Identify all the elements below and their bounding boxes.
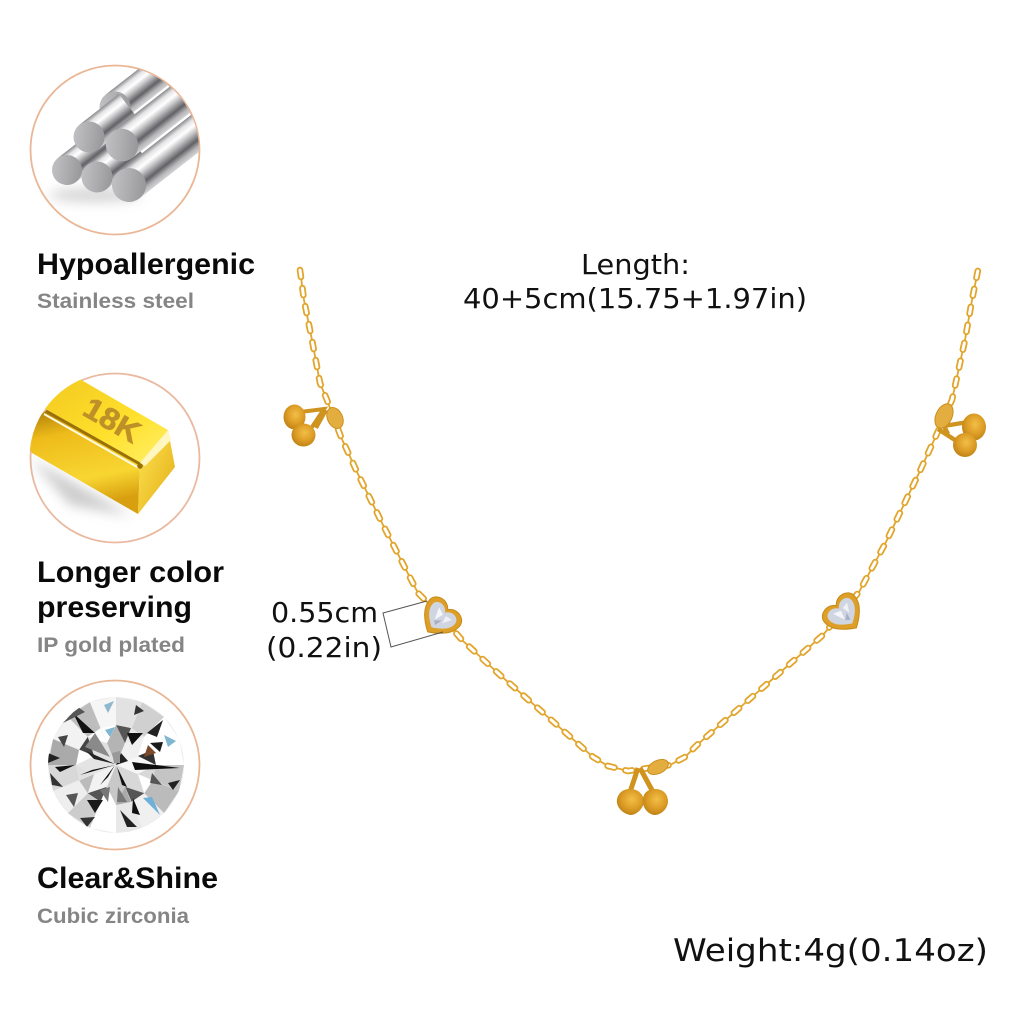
label: charm size: (0.22in): [266, 632, 382, 664]
dimension bracket: [383, 601, 443, 647]
icon: cubic zirconia diamond: [30, 680, 200, 850]
charm: center cherry: [617, 756, 671, 815]
label: necklace length: 40+5cm(15.75+1.97in): [463, 283, 807, 315]
label: necklace length: [463, 249, 807, 315]
icon: 18K gold bar: [20, 365, 200, 542]
charm: left heart with crystal: [413, 593, 466, 645]
label: charm size: [266, 597, 382, 664]
charm: left cherry: [284, 404, 346, 446]
label: weight: Weight:4g(0.14oz): [673, 933, 988, 969]
heading: Longer color preserving: Longer color: [37, 556, 225, 589]
charm: right heart with crystal: [818, 589, 871, 641]
heading: Clear&Shine: Clear&Shine: [37, 862, 218, 895]
label: necklace length: Length:: [581, 249, 690, 281]
necklace chain: [300, 270, 978, 771]
icon: stainless steel rods: [30, 64, 200, 236]
subheading: Stainless steel: Stainless steel: [37, 289, 194, 313]
subheading: IP gold plated: IP gold plated: [37, 633, 185, 657]
heading: Hypoallergenic: Hypoallergenic: [37, 248, 255, 281]
heading: Longer color preserving: [37, 556, 225, 624]
heading: Longer color preserving: preserving: [37, 591, 192, 624]
icon: 18K gold bar: 18K: [78, 391, 146, 450]
charm: right cherry: [931, 401, 986, 457]
label: charm size: 0.55cm: [271, 597, 378, 629]
subheading: Cubic zirconia: Cubic zirconia: [37, 904, 190, 928]
